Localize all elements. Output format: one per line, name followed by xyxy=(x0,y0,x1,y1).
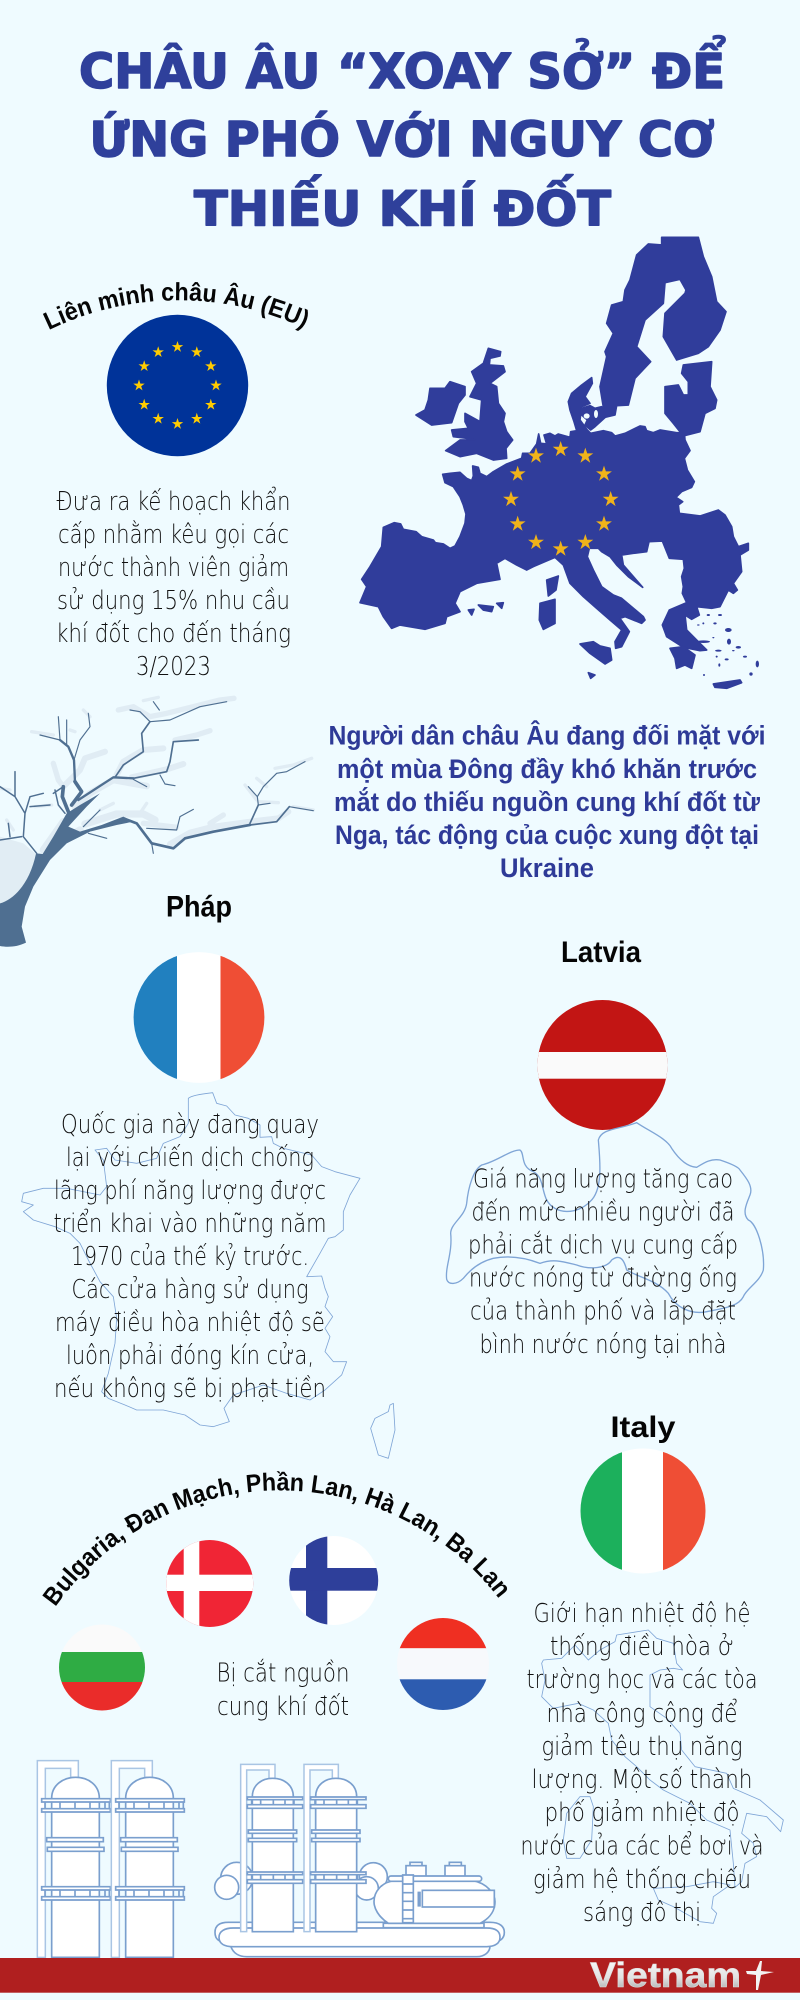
text block: highlighted statement xyxy=(328,720,766,883)
text block: Italy: giảm tiêu thụ năng xyxy=(542,1732,742,1762)
text block: Italy: giảm hệ thống chiếu xyxy=(533,1865,751,1895)
text block: Latvia: Giá năng lượng tăng cao xyxy=(473,1165,733,1195)
icon: Denmark flag xyxy=(166,1540,254,1627)
text block: highlighted statement: một mùa Đông đầy khó khăn trước xyxy=(337,754,757,784)
text block: EU plan: 3/2023 xyxy=(136,652,211,682)
icon: Latvia flag xyxy=(538,1000,668,1130)
text block: highlighted statement: Người dân châu Âu đang đối mặt với xyxy=(328,720,766,751)
heading: five countries arc: Bulgaria, Đan Mạch, Phần Lan, Hà Lan, Ba Lan xyxy=(42,1471,508,1606)
text block: EU plan xyxy=(56,486,291,682)
text block: France: luôn phải đóng kín cửa, xyxy=(66,1341,314,1371)
illustration: snowy tree xyxy=(0,697,313,947)
text block: highlighted statement: Nga, tác động của cuộc xung đột tại xyxy=(335,820,759,850)
text block: EU plan: cấp nhằm kêu gọi các xyxy=(58,519,289,550)
icon: Finland flag xyxy=(289,1536,378,1625)
icon: EU flag xyxy=(106,314,248,456)
title: CHÂU ÂU “XOAY SỞ” ĐỂ xyxy=(79,35,725,100)
icon: France flag xyxy=(130,950,268,1085)
text block: France: nếu không sẽ bị phạt tiền xyxy=(54,1374,326,1404)
text block: Latvia: đến mức nhiều người đã xyxy=(472,1198,734,1228)
footer bar xyxy=(0,1958,800,1993)
text block: EU plan: khí đốt cho đến tháng xyxy=(56,619,291,649)
text block: France: 1970 của thế kỷ trước. xyxy=(71,1242,309,1272)
text block: Latvia: phải cắt dịch vụ cung cấp xyxy=(468,1230,738,1261)
text block: France: Quốc gia này đang quay xyxy=(61,1110,319,1140)
text block: France: lại với chiến dịch chống xyxy=(66,1143,314,1173)
icon: Netherlands flag xyxy=(400,1618,486,1710)
text block: gas supply cut: Bị cắt nguồn xyxy=(216,1658,350,1689)
text block: EU plan: sử dụng 15% nhu cầu xyxy=(57,586,290,616)
text block: highlighted statement: Ukraine xyxy=(500,853,594,883)
text block: France xyxy=(54,1110,326,1404)
map: European Union silhouette xyxy=(360,237,759,688)
heading: Pháp: Pháp xyxy=(166,890,232,924)
title: ỨNG PHÓ VỚI NGUY CƠ xyxy=(90,111,714,168)
text block: Italy: thống điều hòa ở xyxy=(550,1632,734,1662)
text block: Latvia xyxy=(468,1165,738,1360)
text block: Italy: lượng. Một số thành xyxy=(532,1765,752,1795)
text block: Italy: sáng đô thị xyxy=(583,1898,701,1928)
text block: France: máy điều hòa nhiệt độ sẽ xyxy=(55,1308,325,1338)
title: THIẾU KHÍ ĐỐT xyxy=(194,174,611,238)
illustration: gas refinery xyxy=(37,1761,504,1957)
outline map: France xyxy=(22,1093,395,1458)
title xyxy=(79,35,725,238)
heading: Liên minh châu Âu (EU): Liên minh châu Âu (EU) xyxy=(43,282,308,331)
heading: Italy: Italy xyxy=(610,1411,676,1444)
text block: Italy: phố giảm nhiệt độ xyxy=(544,1798,740,1828)
outline map: Italy xyxy=(542,1630,783,1923)
text block: Italy xyxy=(520,1599,764,1928)
text block: EU plan: nước thành viên giảm xyxy=(58,553,289,583)
text block: gas supply cut: cung khí đốt xyxy=(217,1692,349,1722)
text block: France: Các cửa hàng sử dụng xyxy=(72,1275,308,1305)
text block: Italy: Giới hạn nhiệt độ hệ xyxy=(534,1599,750,1629)
logo: Vietnam+: Vietnam xyxy=(590,1956,741,1995)
text block: gas supply cut xyxy=(216,1658,350,1722)
text block: Italy: nhà công cộng để xyxy=(546,1698,738,1729)
text block: EU plan: Đưa ra kế hoạch khẩn xyxy=(56,486,290,517)
outline map: Latvia xyxy=(446,1123,764,1312)
heading: Latvia: Latvia xyxy=(561,936,641,969)
icon: Bulgaria flag xyxy=(59,1624,145,1710)
refinery with tank xyxy=(215,1764,504,1957)
text block: Latvia: của thành phố và lắp đặt xyxy=(470,1296,736,1327)
icon: Italy flag xyxy=(580,1448,706,1574)
text block: highlighted statement: mắt do thiếu nguồn cung khí đốt từ xyxy=(334,786,760,817)
left columns xyxy=(37,1761,184,1957)
text block: Latvia: bình nước nóng tại nhà xyxy=(480,1330,726,1360)
text block: Latvia: nước nóng từ đường ống xyxy=(469,1264,737,1294)
text block: France: lãng phí năng lượng được xyxy=(54,1176,326,1206)
text block: France: triển khai vào những năm xyxy=(54,1208,326,1239)
